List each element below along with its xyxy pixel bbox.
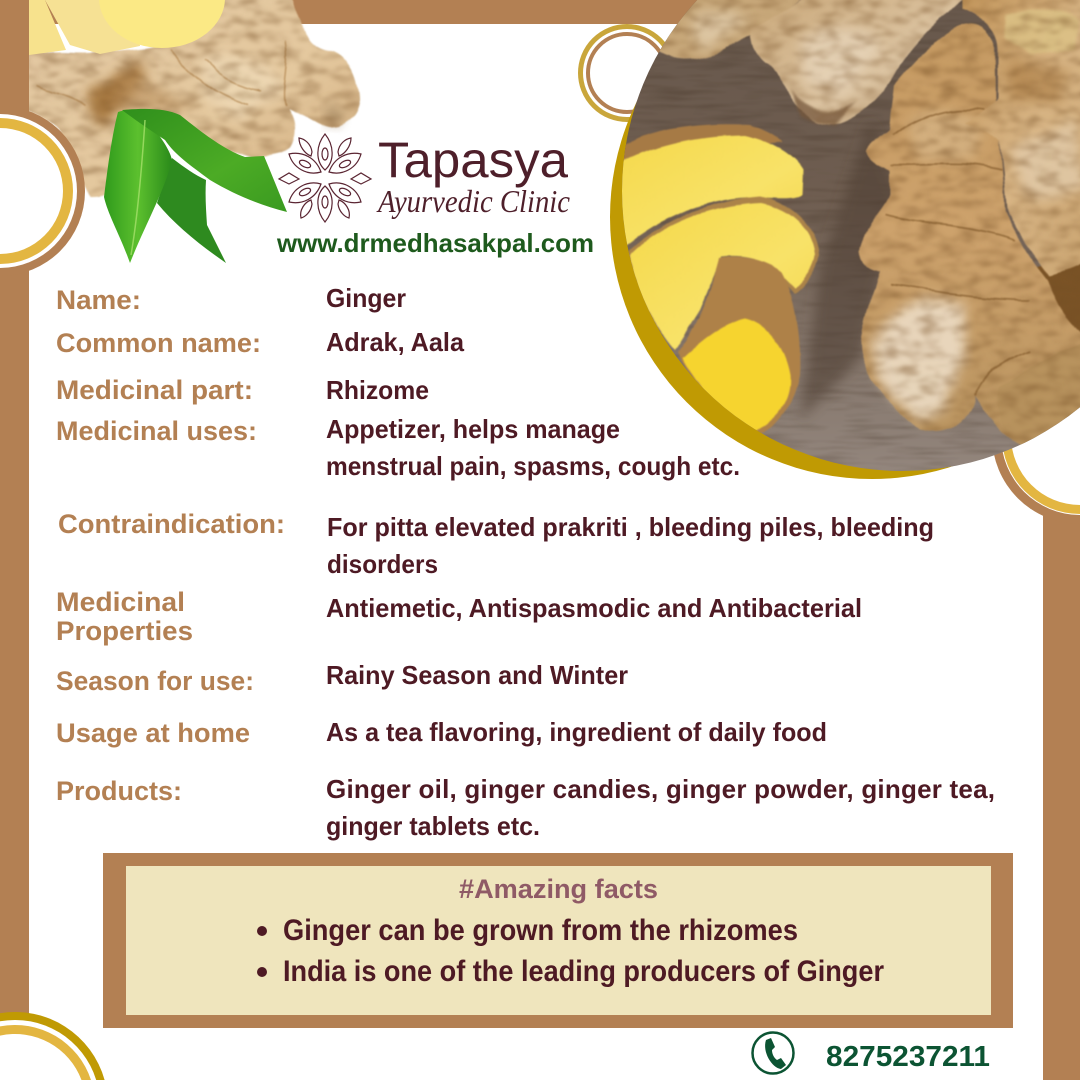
row: medicinal properties: Medicinal: [56, 587, 185, 617]
decorative ring: left: [0, 106, 85, 276]
row: common name: [56, 327, 465, 358]
photo: ginger on wooden board: [600, 0, 1080, 480]
row: medicinal uses: menstrual pain, spasms, cough etc.: [326, 451, 740, 481]
row: usage at home: [56, 717, 827, 748]
row: season for use: Rainy Season and Winter: [326, 660, 628, 690]
logo: Tapasya Ayurvedic Clinic: [279, 132, 570, 222]
row: medicinal uses: Appetizer, helps manage: [326, 414, 620, 444]
row: medicinal part: Medicinal part:: [56, 375, 253, 405]
row: medicinal part: Rhizome: [326, 375, 429, 405]
logo: Tapasya Ayurvedic Clinic: Ayurvedic Clinic: [376, 183, 570, 219]
row: season for use: Season for use:: [56, 666, 254, 696]
row: season for use: [56, 660, 628, 696]
icon: green leaves: [104, 109, 287, 263]
fact 2: India is one of the leading producers of Ginger: [283, 955, 884, 988]
decorative ring: top centre: [580, 26, 674, 120]
row: contraindication: Contraindication:: [58, 509, 285, 539]
logo: Tapasya Ayurvedic Clinic: Tapasya: [378, 132, 568, 188]
decorative ring: lower right: [992, 348, 1080, 524]
heading: amazing facts: #Amazing facts: [459, 874, 658, 904]
row: products: Products:: [56, 776, 182, 806]
decorative ring: bottom left: [0, 1012, 105, 1080]
website url: www.drmedhasakpal.com: [276, 228, 594, 258]
row: name: [56, 283, 406, 315]
icon: phone: [752, 1032, 794, 1074]
row: medicinal part: [56, 375, 429, 405]
row: contraindication: For pitta elevated prakriti , bleeding piles, bleeding: [327, 512, 934, 542]
row: medicinal properties: Properties: [56, 616, 193, 646]
panel: amazing facts: [103, 853, 1013, 1028]
row: contraindication: [58, 509, 934, 579]
row: common name: Adrak, Aala: [326, 327, 465, 357]
icon: mandala: [279, 134, 371, 222]
fact 1: Ginger can be grown from the rhizomes: [283, 914, 798, 947]
row: name: Name:: [56, 285, 141, 315]
row: products: ginger tablets etc.: [326, 811, 540, 841]
row: medicinal uses: Medicinal uses:: [56, 416, 257, 446]
row: usage at home: Usage at home: [56, 718, 250, 748]
row: medicinal properties: Antiemetic, Antispasmodic and Antibacterial: [326, 593, 862, 623]
phone number: 8275237211: [826, 1041, 990, 1073]
top-left ginger illustration: [10, 0, 360, 197]
row: products: Ginger oil, ginger candies, ginger powder, ginger tea,: [326, 774, 995, 804]
row: name: Ginger: [326, 283, 406, 313]
row: products: [56, 774, 995, 841]
row: medicinal uses: [56, 414, 740, 481]
row: contraindication: disorders: [327, 549, 438, 579]
row: common name: Common name:: [56, 328, 261, 358]
row: medicinal properties: [56, 587, 862, 646]
row: usage at home: As a tea flavoring, ingredient of daily food: [326, 717, 827, 747]
photo crescent border: [610, 0, 1080, 479]
